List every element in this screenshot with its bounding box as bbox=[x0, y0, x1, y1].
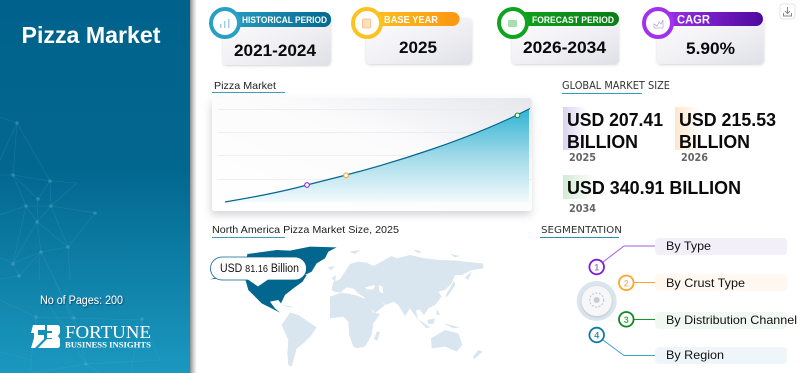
logo: Fortune Business Insights: FORTUNE bbox=[65, 322, 151, 342]
trend line bbox=[225, 108, 530, 202]
inland seas bbox=[365, 285, 375, 289]
central hub icon bbox=[577, 281, 617, 321]
segment 4: By Region bbox=[589, 328, 787, 364]
stat card: base year bbox=[353, 9, 472, 64]
segment 1: By Type bbox=[589, 238, 787, 274]
stat card: CAGR: CAGR bbox=[677, 12, 710, 26]
sidebar title: Pizza Market bbox=[22, 22, 161, 48]
segmentation diagram bbox=[577, 238, 797, 364]
map: North America highlighted bbox=[210, 247, 337, 313]
market size 2025: USD 207.41 bbox=[567, 110, 663, 130]
stat card: forecast period: FORECAST PERIOD bbox=[532, 15, 614, 26]
segment 4: By Region: 4 bbox=[594, 330, 599, 340]
market size 2025: 2025 bbox=[569, 151, 596, 164]
stat card: base year: 2025 bbox=[399, 38, 437, 57]
area chart bbox=[212, 98, 532, 211]
heading: segmentation: SEGMENTATION bbox=[541, 225, 622, 236]
market size 2026: USD 215.53 bbox=[679, 110, 776, 130]
segment 1: By Type: 1 bbox=[594, 262, 599, 272]
icon: monitor chart bbox=[508, 20, 517, 27]
stat card: historical period: HISTORICAL PERIOD bbox=[242, 15, 327, 26]
market size 2025 bbox=[563, 107, 663, 164]
market size 2026: 2026 bbox=[681, 151, 708, 164]
icon: bar chart bbox=[220, 19, 230, 28]
heading: Pizza Market chart: Pizza Market bbox=[214, 80, 276, 92]
callout: North America value: USD 81.16 Billion bbox=[220, 263, 299, 275]
logo: Fortune Business Insights: BUSINESS INSIGHTS bbox=[65, 340, 152, 350]
data point 2025 bbox=[305, 183, 309, 187]
page count: No of Pages: 200 bbox=[40, 295, 123, 307]
segment 3: By Distribution Channel: 3 bbox=[624, 315, 629, 325]
heading: global market size: GLOBAL MARKET SIZE bbox=[562, 80, 670, 92]
world map bbox=[210, 247, 483, 367]
segment 2: By Crust Type: By Crust Type bbox=[666, 276, 745, 290]
market size 2034: USD 340.91 BILLION bbox=[567, 178, 741, 198]
segment 2: By Crust Type: 2 bbox=[624, 278, 629, 288]
segment 4: By Region: By Region bbox=[666, 348, 724, 362]
stat card: historical period bbox=[211, 9, 331, 65]
market size 2034 bbox=[563, 175, 741, 215]
map: Iceland bbox=[327, 266, 335, 270]
segment 3: By Distribution Channel: By Distribution Channel bbox=[666, 313, 797, 327]
market size 2025: BILLION bbox=[567, 132, 638, 152]
map: eastern hemisphere landmasses bbox=[330, 249, 483, 359]
market size 2026: BILLION bbox=[679, 132, 750, 152]
map: South America bbox=[282, 313, 317, 367]
icon: growth chart bbox=[654, 20, 663, 28]
area fill bbox=[225, 109, 529, 202]
segment 1: By Type: By Type bbox=[666, 239, 711, 253]
stat card: forecast period bbox=[499, 9, 619, 64]
stat card: historical period: 2021-2024 bbox=[234, 41, 317, 60]
sidebar panel bbox=[0, 0, 197, 373]
icon: FB mark bbox=[31, 325, 60, 348]
market size 2026 bbox=[675, 107, 776, 164]
segment 3: By Distribution Channel bbox=[619, 312, 797, 329]
icon: calendar bbox=[362, 19, 370, 28]
stat card: forecast period: 2026-2034 bbox=[523, 38, 607, 57]
callout: North America value bbox=[210, 257, 306, 287]
heading: North America market size: North America Pizza Market Size, 2025 bbox=[212, 224, 399, 236]
stat card: CAGR: 5.90% bbox=[686, 39, 735, 58]
segment 2: By Crust Type bbox=[619, 274, 787, 291]
stat card: base year: BASE YEAR bbox=[384, 15, 439, 26]
icon: download button bbox=[780, 4, 795, 19]
market size 2034: 2034 bbox=[569, 202, 596, 215]
stat card: CAGR bbox=[644, 9, 764, 64]
data point 2034 bbox=[515, 113, 520, 118]
data point 2026 bbox=[344, 173, 348, 178]
logo: Fortune Business Insights bbox=[31, 322, 152, 350]
